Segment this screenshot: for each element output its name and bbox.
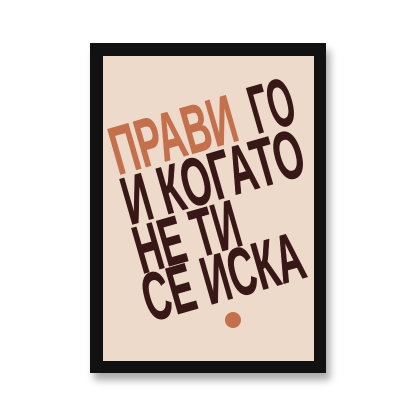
headline line 3: НЕ ТИ — [125, 186, 249, 288]
headline line 1: second word: ГО — [240, 63, 303, 148]
orange dot — [225, 312, 241, 328]
poster paper — [103, 56, 314, 361]
black frame — [90, 43, 326, 373]
frame shadow — [94, 50, 330, 380]
headline line 1: highlighted word: ПРАВИ — [101, 81, 245, 189]
